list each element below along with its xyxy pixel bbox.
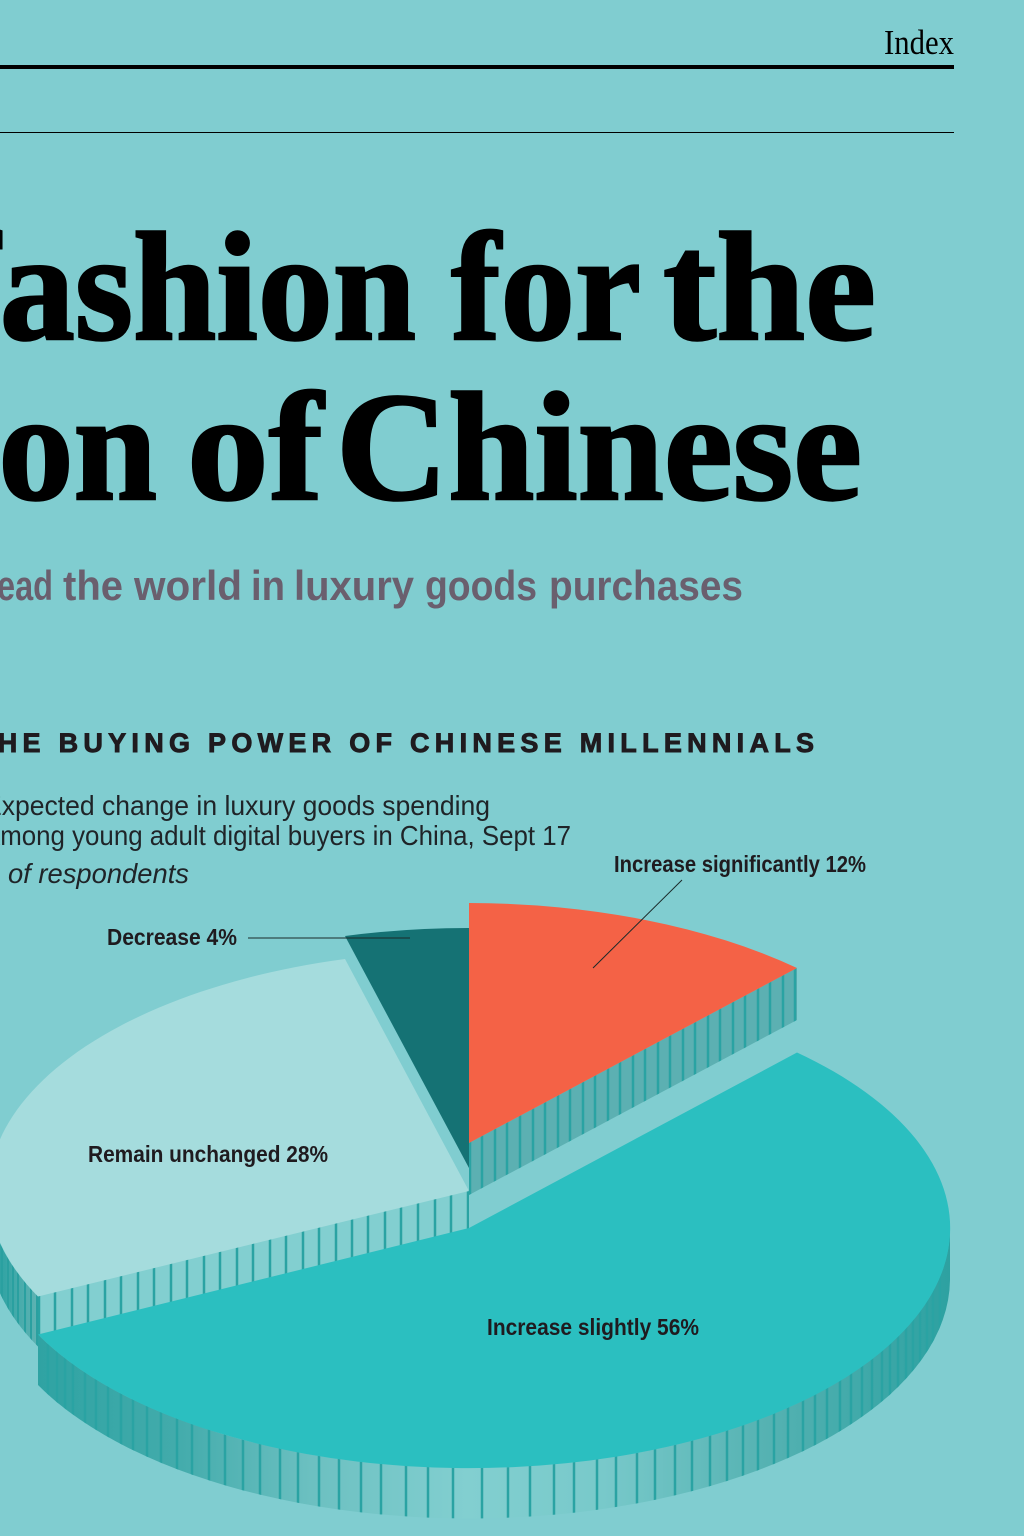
chart description: [0, 790, 571, 889]
subtitle: in: [251, 562, 285, 609]
label: increase slightly 56%: Increase slightly 56%: [487, 1314, 699, 1340]
title: for: [451, 201, 641, 373]
subtitle: [0, 562, 743, 609]
label: decrease 4%: Decrease 4%: [107, 924, 237, 950]
label: increase significantly 12%: [593, 851, 866, 968]
subtitle: world: [133, 562, 242, 609]
3D pie chart: [0, 903, 950, 1530]
title: [0, 201, 876, 533]
subtitle: goods: [425, 562, 537, 609]
title: Chinese: [336, 361, 862, 533]
title: of: [187, 361, 326, 533]
title: the: [663, 201, 876, 373]
slice: increase significantly 12%: [469, 903, 797, 1200]
chart heading: THE BUYING POWER OF CHINESE MILLENNIALS: [0, 728, 814, 758]
subtitle: purchases: [549, 562, 743, 609]
label: remain unchanged 28%: Remain unchanged 28%: [88, 1141, 328, 1167]
chart description: Expected change in luxury goods spending: [0, 790, 490, 821]
slice: increase slightly 56%: [38, 1052, 950, 1530]
subtitle: the: [63, 562, 123, 609]
chart description: Among young adult digital buyers in China, Sept 17: [0, 820, 571, 851]
subtitle: luxury: [294, 562, 415, 609]
slice: remain unchanged 28%: [0, 959, 469, 1350]
section label: Index: Index: [884, 23, 954, 62]
label: increase significantly 12%: Increase significantly 12%: [614, 851, 866, 877]
slice: decrease 4%: [345, 928, 469, 1168]
